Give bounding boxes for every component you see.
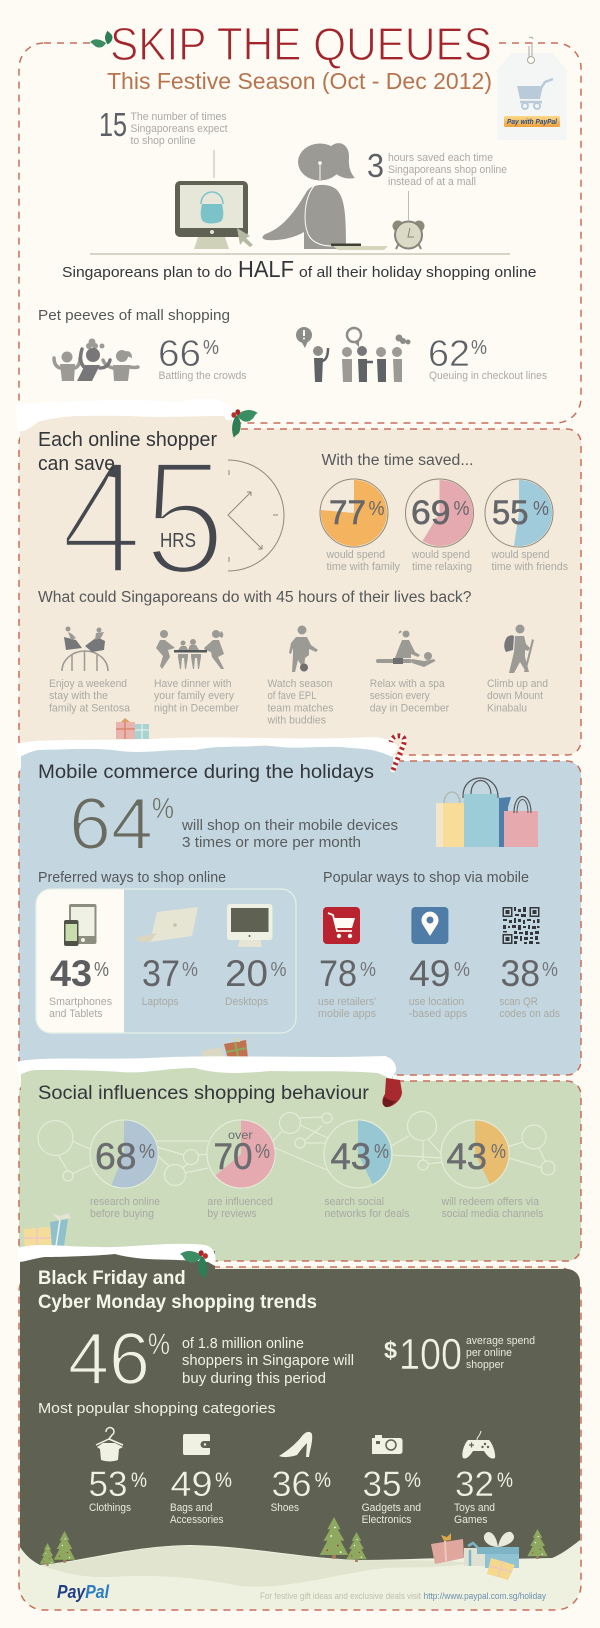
heading: pet peeves: Pet peeves of mall shopping <box>38 307 230 324</box>
category: clothing <box>88 1428 147 1514</box>
activity: Sentosa: family at Sentosa <box>49 702 131 714</box>
stat: 37 percent: % <box>182 959 198 981</box>
activity: football: team matches <box>268 702 334 714</box>
stat: 64 percent: 3 times or more per month <box>182 835 361 851</box>
stat: 43 percent <box>49 953 112 1020</box>
pie: 68 percent research: research online <box>90 1196 160 1208</box>
heading: each online shopper: can save <box>38 453 115 475</box>
activity: dinner: your family every <box>154 690 234 702</box>
category: gadgets <box>362 1435 421 1526</box>
pie: 68 percent research <box>90 1120 160 1220</box>
activity: dinner <box>154 630 239 714</box>
activity: hiking: Kinabalu <box>487 702 527 714</box>
stat: 46 percent: 46 <box>68 1319 150 1400</box>
icon: desktop <box>227 904 272 947</box>
stat: 62 percent: Queuing in checkout lines <box>429 370 547 382</box>
stat: 43 percent: Smartphones <box>49 996 112 1008</box>
mobile way: location apps: -based apps <box>409 1008 468 1020</box>
icon: QR code <box>502 907 540 944</box>
icon: location pin <box>411 907 448 944</box>
activity: spa: session every <box>370 690 430 702</box>
panel: intro <box>19 18 581 423</box>
heading: Black Friday: Cyber Monday shopping trends <box>38 1291 317 1313</box>
category: shoes: Shoes <box>271 1502 299 1514</box>
icon: computer with handbag <box>175 181 253 249</box>
icon: holly by title <box>90 31 112 48</box>
heading: each online shopper <box>38 429 217 475</box>
pie: 43 percent social offers: 43 <box>446 1136 487 1177</box>
pie: 43 percent social networks <box>324 1120 410 1220</box>
panel: time saved <box>16 399 581 755</box>
mobile way: retailer apps: 78 <box>319 953 357 994</box>
stat: 43 percent: % <box>94 959 109 981</box>
category: gadgets: Electronics <box>362 1514 412 1526</box>
pie: 69 percent relaxing: would spend <box>411 549 470 561</box>
category: gadgets: 35 <box>362 1465 402 1504</box>
icon: gifts <box>201 1037 248 1063</box>
category: toys <box>454 1431 513 1526</box>
icon: holly <box>231 409 258 438</box>
category: bags: 49 <box>170 1465 212 1504</box>
pie: 43 percent social offers: will redeem offers via <box>441 1196 540 1208</box>
stat: 64 percent: will shop on their mobile devices <box>181 818 398 834</box>
stat: 3 hours: hours saved each time <box>388 152 493 164</box>
activity: football: with buddies <box>267 714 326 726</box>
stat: 66 percent: 66 <box>158 332 201 374</box>
pie: 43 percent social offers: social media channels <box>442 1208 544 1220</box>
pie: 69 percent relaxing: % <box>454 498 470 520</box>
category: bags: Bags and <box>170 1502 212 1514</box>
icon: alarm clock <box>392 220 424 249</box>
mobile way: QR codes: % <box>542 959 558 981</box>
stat: 37 percent: Laptops <box>142 996 179 1008</box>
category: shoes: 36 <box>272 1465 312 1504</box>
icon: gifts <box>23 1213 71 1247</box>
stat: 20 percent: % <box>270 959 287 981</box>
icon: tablet and phone <box>64 904 96 946</box>
category: toys: 32 <box>455 1465 494 1504</box>
category: bags <box>170 1434 232 1526</box>
stat: 66 percent: Battling the crowds <box>158 370 247 382</box>
category: shoes <box>271 1432 331 1514</box>
category: gadgets: Gadgets and <box>362 1502 421 1514</box>
stat: 20 percent: 20 <box>225 953 268 994</box>
snow cap <box>16 737 398 758</box>
activity: dinner: Have dinner with <box>154 678 232 690</box>
heading: popular ways: Popular ways to shop via mobile <box>323 870 529 886</box>
stat: 100 dollars: average spend <box>466 1335 535 1347</box>
stat: 100 dollars: per online <box>466 1347 512 1359</box>
activity: football: Watch season <box>268 678 332 690</box>
stat: 3 hours <box>367 147 507 220</box>
pie: 68 percent research: before buying <box>90 1208 154 1220</box>
icon: shopping bags <box>436 778 538 847</box>
heading: popular categories: Most popular shopping categories <box>38 1401 276 1417</box>
stat: 64 percent: 64 <box>69 784 153 865</box>
icon: crowd <box>54 338 138 381</box>
icon: half clock <box>228 460 284 571</box>
category: shoes: % <box>315 1469 331 1492</box>
activity: Sentosa <box>49 626 131 714</box>
pie: 77 percent family: would spend <box>326 549 385 561</box>
stat: 62 percent: % <box>471 337 487 359</box>
pie: 69 percent relaxing: 69 <box>411 494 450 532</box>
icon: camera <box>372 1435 402 1454</box>
icon: gift pile <box>431 1532 519 1580</box>
pie: 43 percent social networks: search social <box>324 1196 384 1208</box>
pie: 55 percent friends: % <box>533 498 549 520</box>
pie: 55 percent friends: 55 <box>492 494 528 532</box>
label: HRS: HRS <box>160 529 196 552</box>
mobile way: retailer apps: mobile apps <box>318 1008 376 1020</box>
stat: 64 percent <box>69 784 398 865</box>
heading: social influences: Social influences shopping behaviour <box>38 1082 370 1104</box>
icon: family dinner <box>156 630 224 669</box>
pie: 77 percent family: 77 <box>329 494 366 532</box>
pie: 55 percent friends <box>485 479 568 573</box>
pie: 68 percent research: % <box>139 1141 155 1163</box>
headline: half of holiday shopping: HALF <box>238 256 294 282</box>
heading: Black Friday: Black Friday and <box>38 1267 186 1289</box>
pie: 55 percent friends: would spend <box>491 549 550 561</box>
category: clothing: Clothings <box>89 1502 131 1514</box>
category: gadgets: % <box>404 1469 421 1492</box>
stat: 62 percent: 62 <box>428 332 470 374</box>
category: toys: Games <box>454 1514 488 1526</box>
snow cap <box>18 1244 216 1266</box>
heading: preferred ways: Preferred ways to shop online <box>38 870 226 886</box>
pie: over 70 percent reviews: % <box>255 1141 270 1163</box>
pie: over 70 percent reviews: are influenced <box>207 1196 273 1208</box>
icon: roller coaster <box>62 626 108 671</box>
panel: mobile commerce <box>16 736 581 1075</box>
pie: 43 percent social networks: % <box>374 1141 389 1163</box>
pie: over 70 percent reviews <box>207 1120 275 1220</box>
icon: high heel <box>279 1432 312 1457</box>
headline: half of holiday shopping: of all their holiday shopping online <box>299 265 536 281</box>
stat: 100 dollars: shopper <box>466 1359 504 1371</box>
pie: 43 percent social offers: % <box>491 1141 506 1163</box>
icon: stocking <box>382 1078 402 1107</box>
stat: 46 percent: of 1.8 million online <box>182 1336 304 1352</box>
icon: game controller <box>462 1431 495 1459</box>
pie: 77 percent family: % <box>368 498 385 520</box>
stat: 15 times: The number of times <box>130 111 227 123</box>
mobile way: retailer apps <box>318 907 376 1020</box>
stat: 3 hours: instead of at a mall <box>388 176 476 188</box>
icon: Christmas trees <box>40 1517 548 1566</box>
icon: laptop <box>134 907 198 942</box>
stat: 66 percent: % <box>203 337 219 359</box>
category: toys: % <box>497 1469 513 1492</box>
stat: 46 percent <box>68 1319 354 1400</box>
pie: over 70 percent reviews: by reviews <box>207 1208 257 1220</box>
stat: 3 hours: 3 <box>367 147 384 184</box>
activity: dinner: night in December <box>154 702 239 714</box>
mobile way: location apps: % <box>454 959 470 981</box>
stat: 3 hours: Singaporeans shop online <box>388 164 507 176</box>
ground and sky <box>20 1269 580 1565</box>
pie: 69 percent relaxing: time relaxing <box>412 561 472 573</box>
stat: 64 percent: % <box>152 793 174 825</box>
stat: 100 dollars: 100 <box>399 1330 462 1379</box>
category: bags: % <box>215 1469 232 1492</box>
stat: 46 percent: % <box>148 1328 170 1361</box>
snow cap <box>16 399 236 431</box>
mobile way: retailer apps: use retailers' <box>318 996 376 1008</box>
stat: 20 percent <box>225 953 287 1008</box>
pie: over 70 percent reviews: over <box>228 1128 253 1142</box>
footer note <box>260 1591 546 1601</box>
stat: 62 percent <box>428 332 547 382</box>
pie: 43 percent social networks: networks for deals <box>324 1208 410 1220</box>
icon: holly <box>180 1250 208 1279</box>
activity: Sentosa: stay with the <box>49 690 108 702</box>
heading: mobile commerce: Mobile commerce during the holidays <box>38 761 374 783</box>
stat: 46 percent: shoppers in Singapore will <box>182 1353 354 1369</box>
activity: football <box>267 626 334 726</box>
activity: spa <box>370 630 450 714</box>
icon: wallet <box>183 1434 210 1455</box>
mobile way: QR codes <box>499 907 560 1020</box>
stat: 43 percent: 43 <box>50 953 92 994</box>
category: clothing: 53 <box>88 1465 128 1504</box>
heading: Black Friday <box>38 1267 317 1313</box>
icon: hiker <box>504 624 534 673</box>
mobile way: location apps <box>409 907 470 1020</box>
stat: 37 percent <box>142 953 198 1008</box>
heading: each online shopper: Each online shopper <box>38 429 217 451</box>
icon: cart app <box>323 907 360 944</box>
mobile way: location apps: use location <box>409 996 464 1008</box>
panel: social influences <box>16 1056 581 1261</box>
activity: spa: day in December <box>370 702 450 714</box>
stat: 100 dollars: $ <box>384 1337 398 1364</box>
icon: PayPal shopping tag: Pay with PayPal <box>507 119 558 126</box>
category: toys: Toys and <box>454 1502 495 1514</box>
activity: football: of fave EPL <box>268 690 316 702</box>
pie: 77 percent family <box>320 479 400 573</box>
subtitle: This Festive Season (Oct - Dec 2012) <box>107 68 492 94</box>
activity: hiking: down Mount <box>487 690 543 702</box>
activity: hiking: Climb up and <box>487 678 548 690</box>
stat: 100 dollars <box>384 1330 535 1379</box>
snow cap <box>16 1056 396 1079</box>
mobile way: location apps: 49 <box>409 953 450 994</box>
pie: 68 percent research: 68 <box>95 1136 136 1177</box>
pie: 69 percent relaxing <box>406 479 474 573</box>
title: SKIP THE QUEUES <box>110 18 492 70</box>
stat: 37 percent: 37 <box>142 953 180 994</box>
icon: checkout queue <box>296 327 410 382</box>
icon: PayPal shopping tag <box>497 37 567 140</box>
pie: 77 percent family: time with family <box>326 561 400 573</box>
pie: 43 percent social networks: 43 <box>330 1136 371 1177</box>
headline: half of holiday shopping <box>62 256 536 282</box>
pie: 55 percent friends: time with friends <box>492 561 568 573</box>
footer note: For festive gift ideas and exclusive deals visit <box>260 1591 421 1601</box>
panel: preferred ways box <box>36 889 296 1033</box>
heading: with the time saved: With the time saved... <box>322 452 474 469</box>
stat: 66 percent <box>158 332 247 382</box>
stat: 15 times: 15 <box>99 106 127 143</box>
activity: hiking <box>487 624 548 714</box>
icon: woman with earphones <box>263 143 388 250</box>
stat: 43 percent: and Tablets <box>49 1008 103 1020</box>
headline: half of holiday shopping: Singaporeans plan to do <box>62 265 232 281</box>
pie: 43 percent social offers <box>441 1120 544 1220</box>
pie: over 70 percent reviews: 70 <box>214 1136 252 1177</box>
stat: 15 times <box>99 106 228 178</box>
heading: what could Singaporeans do: What could Singaporeans do with 45 hours of their lives back? <box>38 589 472 606</box>
stat: 15 times: to shop online <box>130 135 196 147</box>
mobile way: QR codes: 38 <box>500 953 540 994</box>
activity: spa: Relax with a spa <box>370 678 446 690</box>
mobile way: retailer apps: % <box>360 959 376 981</box>
icon: footballer <box>289 626 318 672</box>
mobile way: QR codes: scan QR <box>499 996 538 1008</box>
icon: candy cane <box>391 736 404 770</box>
stat: 20 percent: Desktops <box>225 996 268 1008</box>
mobile way: QR codes: codes on ads <box>499 1008 560 1020</box>
stat: 46 percent: buy during this period <box>182 1371 326 1387</box>
icon: massage <box>376 630 436 667</box>
icon: gifts <box>116 718 149 739</box>
icon: hanger with top <box>96 1428 123 1462</box>
category: clothing: % <box>131 1469 147 1492</box>
footer note: http://www.paypal.com.sg/holiday <box>424 1591 546 1601</box>
panel: Black Friday <box>18 1244 581 1610</box>
activity: Sentosa: Enjoy a weekend <box>49 678 127 690</box>
stat: 15 times: Singaporeans expect <box>130 123 228 135</box>
big number: 45 hours: 45 <box>60 426 226 609</box>
logo: PayPal: PayPal <box>57 1582 110 1602</box>
category: bags: Accessories <box>170 1514 224 1526</box>
network background <box>38 1112 555 1186</box>
